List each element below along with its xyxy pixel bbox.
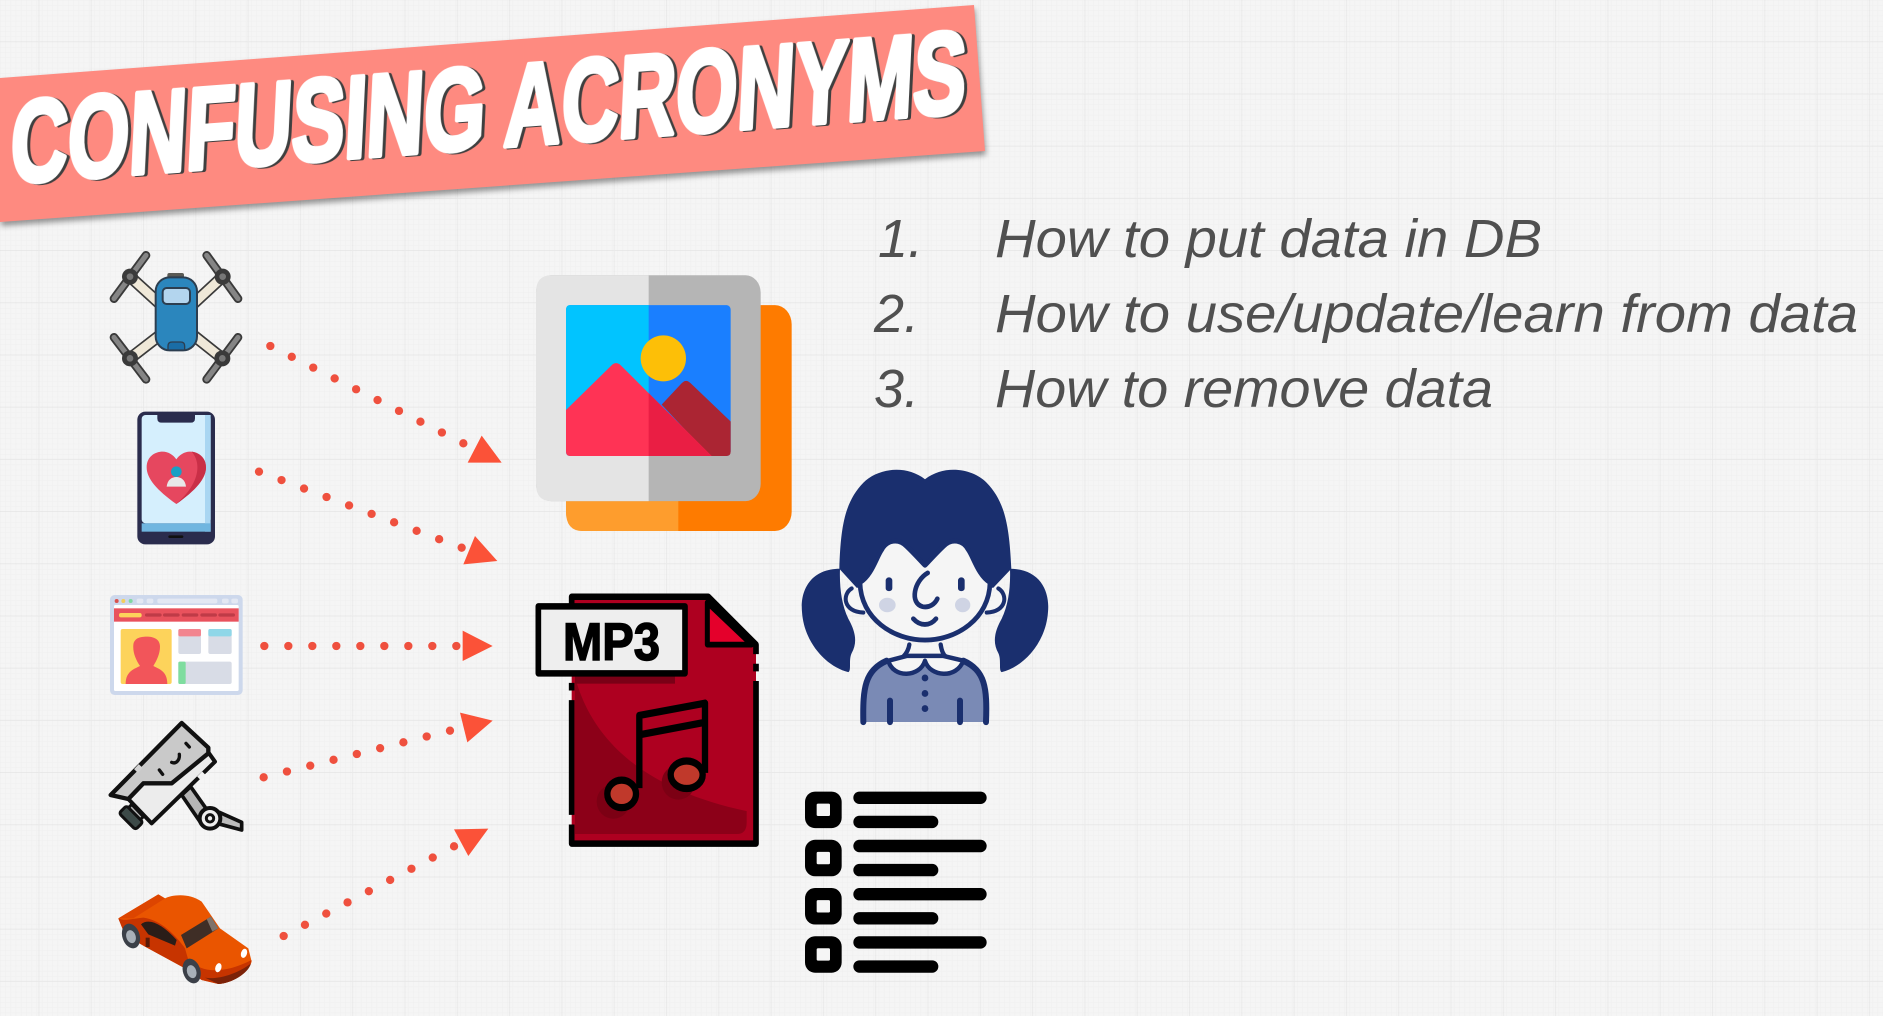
item 1: 1. bbox=[878, 209, 923, 269]
arrow: camera to data bbox=[264, 713, 493, 777]
item 1: How to put data in DB bbox=[995, 209, 1542, 269]
title banner bbox=[0, 5, 985, 222]
numbered list text bbox=[873, 209, 1858, 419]
icon: girl user bbox=[802, 470, 1048, 722]
item 2: 2. bbox=[873, 284, 919, 344]
icon: smartphone with heart bbox=[137, 412, 215, 544]
item 3: How to remove data bbox=[995, 359, 1493, 419]
arrow: drone to data bbox=[270, 346, 502, 463]
MP3 label: MP3 bbox=[563, 613, 660, 672]
icon: red car bbox=[118, 894, 252, 986]
item 3: 3. bbox=[874, 359, 919, 419]
arrow: phone to data bbox=[259, 472, 497, 564]
item 2: How to use/update/learn from data bbox=[995, 284, 1858, 344]
icon: web page profile bbox=[110, 595, 243, 695]
icon: drone bbox=[114, 255, 238, 379]
icon: checklist bbox=[805, 792, 987, 973]
icon: security camera bbox=[111, 723, 242, 830]
arrow: web page to data bbox=[264, 631, 493, 661]
icon: image files bbox=[536, 275, 792, 531]
arrow: car to data bbox=[284, 829, 488, 936]
icon: MP3 file bbox=[538, 597, 756, 844]
banner ribbon bbox=[0, 5, 985, 222]
